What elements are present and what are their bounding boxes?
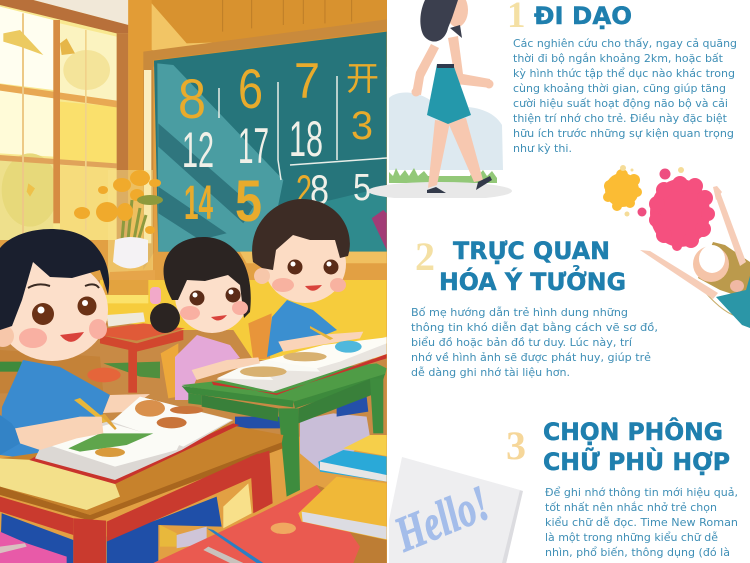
chalk numbers: 6 <box>238 57 263 120</box>
section 1 body <box>513 37 737 155</box>
chalk numbers <box>178 52 387 234</box>
splash blobs and falling girl <box>603 165 750 328</box>
book 2 <box>212 354 387 395</box>
chalk numbers: 2 <box>296 166 312 213</box>
section 1 body: như kỳ thi. <box>513 142 572 155</box>
section 1 walking woman <box>368 0 512 204</box>
chalk numbers: 7 <box>294 53 320 109</box>
section 3 number: 3 <box>506 423 526 468</box>
section 2 heading: HÓA Ý TƯỞNG <box>439 263 626 296</box>
books at right <box>318 450 387 482</box>
back boy <box>252 199 350 357</box>
section 3 body: nhìn, phổ biến, thông dụng (đó là <box>545 546 730 559</box>
background furniture <box>0 280 387 437</box>
section 2 heading: TRỰC QUAN <box>453 237 610 265</box>
section 1 heading: ĐI DẠO <box>534 2 632 30</box>
girl <box>150 237 251 400</box>
section 1 body: Các nghiên cứu cho thấy, ngay cả quãng <box>513 37 737 50</box>
chalk numbers: 3 <box>351 104 373 148</box>
section 1 body: hữu ích trước những sự kiện quan trọng <box>513 127 734 140</box>
section 3 heading: CHỌN PHÔNG <box>543 416 723 446</box>
chalk numbers: 8 <box>310 166 329 213</box>
hello note paper <box>387 457 523 563</box>
section 1 body: kỳ hình thức tập thể dục nào khác trong <box>513 67 735 80</box>
chalk numbers: 5 <box>353 167 371 209</box>
section 1 body: cười hiệu suất hoạt động não bộ và cải <box>513 97 728 110</box>
section 1 body: thời đi bộ ngắn khoảng 2km, hoặc bất <box>513 52 724 65</box>
section 3 body: là một trong những kiểu chữ dễ <box>545 531 718 544</box>
green desk and book <box>182 326 387 497</box>
chalk numbers: 14 <box>184 177 213 230</box>
chalk numbers: 5 <box>235 169 262 234</box>
section 1 body: cùng khoảng thời gian, cũng giúp tăng <box>513 82 726 95</box>
chalk numbers: 12 <box>182 122 214 178</box>
section 2 body: dễ dàng ghi nhớ tài liệu hơn. <box>411 366 570 379</box>
front desk and book <box>0 397 387 563</box>
section 3 body: Để ghi nhớ thông tin mới hiệu quả, <box>545 486 738 499</box>
chalk numbers: 8 <box>178 67 206 130</box>
section 3 heading: CHỮ PHÙ HỢP <box>543 446 730 476</box>
section 2 body: thông tin khó diễn đạt bằng cách vẽ sơ đồ, <box>411 321 658 334</box>
window <box>0 0 128 240</box>
boy arm <box>278 332 363 352</box>
section 3 heading <box>543 416 730 476</box>
chalk numbers: 17 <box>238 118 269 174</box>
section 2 heading <box>439 237 626 296</box>
book 1 <box>29 423 239 484</box>
wooden wall and blackboard <box>128 0 388 273</box>
section 3 body <box>545 486 738 559</box>
chalk numbers: 开 <box>346 52 379 100</box>
section 2 body: Bố mẹ hướng dẫn trẻ hình dung những <box>411 306 628 319</box>
section 2 body: nhớ về hình ảnh sẽ được phát huy, giúp trẻ <box>411 351 651 364</box>
section 1 body: thiện trí nhớ cho trẻ. Điều này đặc biệt <box>513 112 728 125</box>
section 2 body: biểu đồ hoặc bản đồ tư duy. Lúc này, trí <box>411 336 633 349</box>
front boy <box>0 229 150 460</box>
hello lettering: Hello! <box>387 475 497 563</box>
chalk numbers: 18 <box>289 111 323 167</box>
flower vase <box>74 170 163 310</box>
section 2 number: 2 <box>415 234 435 279</box>
section 3 body: kiểu chữ dễ đọc. Time New Roman <box>545 516 738 529</box>
classroom illustration <box>0 0 389 563</box>
section 3 body: tốt nhất nên nhắc nhở trẻ chọn <box>545 501 717 514</box>
section 2 body <box>411 306 658 379</box>
